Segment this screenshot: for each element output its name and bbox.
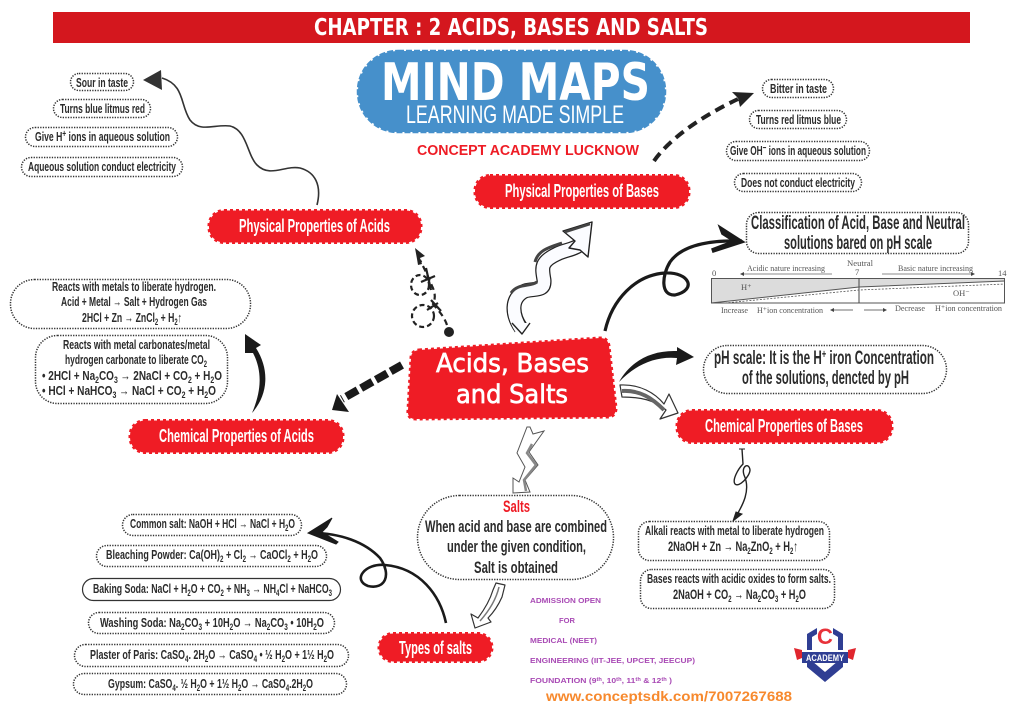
bleaching powder: Bleaching Powder: Ca(OH): [106, 547, 271, 562]
panel: pH scale definition: of the solutions, dencted by pH: [742, 368, 909, 389]
chart: pH scale: 14: [998, 268, 1007, 278]
panel: acid and carbonate reaction: 2: [204, 390, 208, 400]
panel: pH scale definition: [704, 346, 946, 394]
bleaching powder: [96, 546, 326, 566]
does not conduct electricity: Does not conduct electricity: [741, 175, 856, 190]
gives OH- ions: [726, 142, 870, 160]
panel: acid and carbonate reaction: O: [214, 368, 222, 383]
chart: pH scale: Acidic nature increasing: [747, 263, 826, 273]
panel: acid and metal reaction: Acid + Metal → Salt + Hydrogen Gas: [61, 294, 207, 309]
gives OH- ions: −: [763, 143, 766, 154]
panel: acid and metal reaction: ↑: [178, 310, 182, 325]
panel: acid and carbonate reaction: → NaCl + CO: [116, 383, 182, 398]
arrow: curled types to common salt: [308, 518, 446, 623]
admission notice: ): [667, 676, 673, 685]
mind maps logo: MIND MAPS: [381, 53, 650, 113]
plaster of paris: 4: [254, 654, 257, 664]
panel: acid and carbonate reaction: 2: [188, 375, 192, 385]
panel: alkali reaction: + H: [773, 538, 790, 554]
panel: acid and carbonate reaction: • HCl + NaHCO: [42, 383, 133, 398]
plaster of paris: [74, 644, 348, 666]
admission notice: & 12: [641, 676, 661, 685]
baking soda: 2: [187, 588, 191, 598]
washing soda: 2: [313, 622, 317, 632]
washing soda: Washing Soda: Na: [100, 615, 214, 630]
panel: acid and carbonate reaction: + H: [185, 383, 204, 398]
baking soda: + NH: [224, 581, 246, 596]
heading: types of salts: [379, 634, 492, 662]
panel: acid and metal reaction: 2: [174, 317, 178, 327]
gives OH- ions: Give OH: [730, 143, 781, 158]
admission notice: th: [616, 677, 622, 683]
chart: pH scale: H⁺ion concentration: [757, 305, 824, 315]
panel: alkali reaction: [638, 522, 830, 560]
panel: base and acidic oxide reaction: [640, 570, 834, 608]
panel: salts definition: under the given condition,: [447, 537, 586, 556]
chart: pH scale: Increase: [721, 305, 748, 315]
panel: base and acidic oxide reaction: + H: [778, 586, 795, 602]
panel: classification heading: [746, 212, 968, 254]
arrow: hollow to chemical properties of bases: [620, 385, 678, 419]
gypsum: .2H: [289, 676, 303, 691]
icon: academy shield logo: C: [817, 624, 833, 649]
panel: acid and carbonate reaction: 2: [95, 375, 99, 385]
baking soda: 3: [246, 588, 250, 598]
panel: acid and carbonate reaction: hydrogen carbonate to liberate CO: [65, 352, 279, 367]
gypsum: O: [306, 676, 313, 691]
bleaching powder: → CaOCl: [246, 547, 287, 562]
chart: pH scale: [711, 258, 1007, 315]
panel: base and acidic oxide reaction: 2: [758, 594, 761, 604]
washing soda: 2: [181, 622, 185, 632]
arrow: hollow salts to types: [471, 583, 505, 628]
aqueous solution conducts: [22, 158, 182, 176]
panel: base and acidic oxide reaction: Bases reacts with acidic oxides to form salts.: [647, 571, 831, 586]
baking soda: O + CO: [191, 581, 221, 596]
panel: alkali reaction: 2: [790, 546, 793, 556]
plaster of paris: . 2H: [188, 647, 205, 662]
baking soda: [82, 578, 340, 600]
gypsum: O + 1½ H: [200, 676, 238, 691]
chart: pH scale: 0: [712, 268, 716, 278]
heading: physical properties of acids: Physical Properties of Acids: [239, 216, 390, 236]
chart: pH scale: H⁺ion concentration: [935, 303, 1003, 313]
gypsum: . ½ H: [176, 676, 197, 691]
panel: base and acidic oxide reaction: 2NaOH + CO: [673, 586, 757, 602]
washing soda: O → Na: [233, 615, 267, 630]
panel: acid and metal reaction: + H: [158, 310, 174, 325]
arrow: curl to alkali box: [733, 449, 750, 521]
panel: pH scale definition: pH scale: It is the H: [714, 348, 889, 369]
admission notice: th: [661, 677, 667, 683]
chart: pH scale: Decrease: [895, 303, 925, 313]
admission notice: FOUNDATION (9: [530, 676, 588, 685]
turns red litmus blue: Turns red litmus blue: [756, 112, 841, 127]
common salt: [122, 514, 302, 536]
panel: salts definition: Salts: [503, 497, 530, 516]
washing soda: CO: [270, 615, 284, 630]
panel: salts definition: Salt is obtained: [474, 558, 558, 577]
plaster of paris: 2: [205, 654, 208, 664]
common salt: O: [288, 516, 295, 531]
washing soda: O: [317, 615, 324, 630]
plaster of paris: Plaster of Paris: CaSO: [90, 647, 228, 662]
panel: acid and carbonate reaction: 3: [112, 390, 116, 400]
panel: alkali reaction: 2NaOH + Zn → Na: [668, 538, 787, 554]
mind maps logo: LEARNING MADE SIMPLE: [406, 101, 624, 129]
heading: chemical properties of bases: Chemical Properties of Bases: [705, 416, 863, 436]
title banner: [53, 12, 970, 43]
title banner: CHAPTER : 2 ACIDS, BASES AND SALTS: [314, 15, 708, 41]
panel: acid and carbonate reaction: CO: [99, 368, 114, 383]
gypsum: 4: [172, 683, 176, 693]
baking soda: → NH: [250, 581, 276, 596]
washing soda: CO: [185, 615, 199, 630]
panel: alkali reaction: 2: [769, 546, 773, 556]
gypsum: O → CaSO: [241, 676, 286, 691]
heading: physical properties of bases: Physical Properties of Bases: [505, 181, 659, 201]
arrow: looped dashed to acid physical properties: [411, 248, 454, 337]
common salt: 2: [285, 523, 288, 533]
panel: acid and metal reaction: 2HCl + Zn → ZnCl: [82, 310, 191, 325]
panel: salts definition: [418, 496, 614, 580]
gives H+ ions: Give H: [35, 129, 76, 144]
panel: base and acidic oxide reaction: 3: [775, 594, 778, 604]
panel: alkali reaction: 2: [747, 546, 751, 556]
panel: acid and carbonate reaction: 3: [114, 375, 118, 385]
heading: physical properties of bases: [475, 176, 689, 208]
bleaching powder: + Cl: [223, 547, 243, 562]
icon: academy shield logo: [794, 624, 856, 682]
admission notice: ADMISSION OPEN: [530, 596, 601, 605]
chart: pH scale: 7: [855, 267, 859, 277]
panel: acid and carbonate reaction: 2: [204, 359, 207, 369]
bitter in taste: [762, 80, 834, 98]
gypsum: 2: [238, 683, 241, 693]
does not conduct electricity: [734, 174, 862, 192]
website link: www.conceptsdk.com/7007267688: [545, 688, 792, 704]
bleaching powder: 2: [287, 554, 291, 564]
panel: acid and carbonate reaction: [36, 336, 228, 404]
baking soda: 4: [276, 588, 279, 598]
chart: pH scale: H⁺: [741, 282, 752, 292]
washing soda: [88, 612, 334, 634]
plaster of paris: O → CaSO: [208, 647, 254, 662]
plaster of paris: O: [327, 647, 334, 662]
chart: pH scale: Neutral: [847, 258, 874, 268]
panel: physical properties of acids list: [22, 74, 182, 176]
bleaching powder: 2: [220, 554, 223, 564]
gypsum: 2: [303, 683, 306, 693]
common salt: Common salt: NaOH + HCl → NaCl + H: [130, 516, 368, 531]
gives OH- ions: ions in aqueous solution: [766, 143, 866, 158]
heading: physical properties of acids: [209, 210, 421, 242]
panel: acid and carbonate reaction: + H: [192, 368, 210, 383]
admission notice: , 10: [602, 676, 616, 685]
plaster of paris: 2: [282, 654, 285, 664]
bleaching powder: + H: [291, 547, 308, 562]
washing soda: + 10H: [202, 615, 230, 630]
bitter in taste: Bitter in taste: [770, 81, 827, 96]
mind maps logo: [358, 51, 665, 132]
panel: acid and metal reaction: [10, 279, 250, 328]
panel: acid and metal reaction: Reacts with metals to liberate hydrogen.: [52, 279, 216, 294]
turns blue litmus red: Turns blue litmus red: [60, 101, 145, 116]
sour in taste: Sour in taste: [76, 75, 128, 90]
turns blue litmus red: [54, 100, 150, 118]
admission notice: [530, 596, 696, 685]
bleaching powder: O: [311, 547, 318, 562]
admission notice: th: [596, 677, 602, 683]
panel: acid and carbonate reaction: • 2HCl + Na: [42, 368, 111, 383]
washing soda: 2: [267, 622, 270, 632]
chart: pH scale: Basic nature increasing: [898, 263, 974, 273]
panel: acid and carbonate reaction: → 2NaCl + CO: [118, 368, 188, 383]
arrow: thick dashed to chemical properties of acids: [332, 365, 402, 412]
admission notice: ENGINEERING (IIT-JEE, UPCET, JEECUP): [530, 656, 696, 665]
academy name: CONCEPT ACADEMY LUCKNOW: [417, 143, 639, 159]
panel: alkali reaction: ZnO: [751, 538, 769, 554]
baking soda: Baking Soda: NaCl + H: [93, 581, 234, 596]
admission notice: MEDICAL (NEET): [530, 636, 598, 645]
baking soda: 2: [221, 588, 224, 598]
arrow: lightning to salts: [513, 427, 544, 493]
plaster of paris: • ½ H: [257, 647, 282, 662]
gives H+ ions: ions in aqueous solution: [66, 129, 170, 144]
gives H+ ions: +: [62, 129, 66, 140]
central topic: [408, 338, 616, 419]
central topic: Acids, Bases: [436, 349, 589, 379]
panel: alkali reaction: Alkali reacts with metal to liberate hydrogen: [645, 523, 824, 538]
panel: acid and carbonate reaction: 2: [182, 390, 185, 400]
bleaching powder: 2: [243, 554, 246, 564]
panel: acid and carbonate reaction: O: [208, 383, 216, 398]
sour in taste: [70, 74, 134, 90]
panel: physical properties of bases list: [726, 80, 870, 192]
panel: base and acidic oxide reaction: → Na: [732, 586, 758, 602]
plaster of paris: 2: [324, 654, 327, 664]
arrow: hollow wavy up: [511, 222, 592, 334]
gypsum: 2: [197, 683, 200, 693]
admission notice: FOR: [559, 616, 576, 625]
panel: base and acidic oxide reaction: CO: [761, 586, 775, 602]
arrow: wavy line to acid physical properties: [143, 70, 319, 205]
heading: chemical properties of acids: Chemical Properties of Acids: [159, 426, 314, 446]
turns red litmus blue: [750, 110, 846, 128]
panel: salts definition: When acid and base are combined: [425, 517, 607, 536]
plaster of paris: 4: [185, 654, 188, 664]
aqueous solution conducts: Aqueous solution conduct electricity: [28, 159, 176, 174]
panel: pH scale definition: iron Concentration: [826, 348, 934, 369]
baking soda: 3: [329, 588, 332, 598]
panel: acid and carbonate reaction: Reacts with metal carbonates/metal: [63, 337, 210, 352]
panel: pH scale definition: +: [822, 347, 826, 361]
plaster of paris: O + 1½ H: [285, 647, 324, 662]
arrow: curled to classification: [605, 226, 744, 331]
gypsum: [74, 674, 346, 694]
panel: acid and carbonate reaction: 2: [210, 375, 214, 385]
arrow: dashed to bases physical properties: [654, 92, 754, 161]
heading: chemical properties of acids: [130, 420, 343, 452]
arrow: swoosh to pH scale box: [619, 347, 694, 382]
gypsum: 4: [286, 683, 289, 693]
admission notice: , 11: [622, 676, 635, 685]
baking soda: Cl + NaHCO: [279, 581, 329, 596]
panel: alkali reaction: ↑: [793, 538, 798, 554]
panel: types of salts list: [74, 514, 348, 694]
bleaching powder: 2: [308, 554, 311, 564]
icon: academy shield logo: ACADEMY: [806, 653, 844, 663]
washing soda: 3: [199, 622, 202, 632]
panel: acid and metal reaction: 2: [155, 317, 158, 327]
chart: pH scale: OH⁻: [953, 288, 970, 298]
panel: base and acidic oxide reaction: O: [799, 586, 806, 602]
panel: base and acidic oxide reaction: 2: [728, 594, 732, 604]
washing soda: • 10H: [288, 615, 313, 630]
panel: base and acidic oxide reaction: 2: [795, 594, 799, 604]
heading: types of salts: Types of salts: [399, 638, 472, 658]
washing soda: 2: [230, 622, 233, 632]
admission notice: th: [635, 677, 641, 683]
central topic: and Salts: [456, 380, 568, 410]
gypsum: Gypsum: CaSO: [108, 676, 203, 691]
heading: chemical properties of bases: [677, 410, 892, 442]
washing soda: 3: [284, 622, 288, 632]
arrow: crescent to reaction boxes: [245, 334, 265, 413]
gives H+ ions: [26, 128, 178, 146]
